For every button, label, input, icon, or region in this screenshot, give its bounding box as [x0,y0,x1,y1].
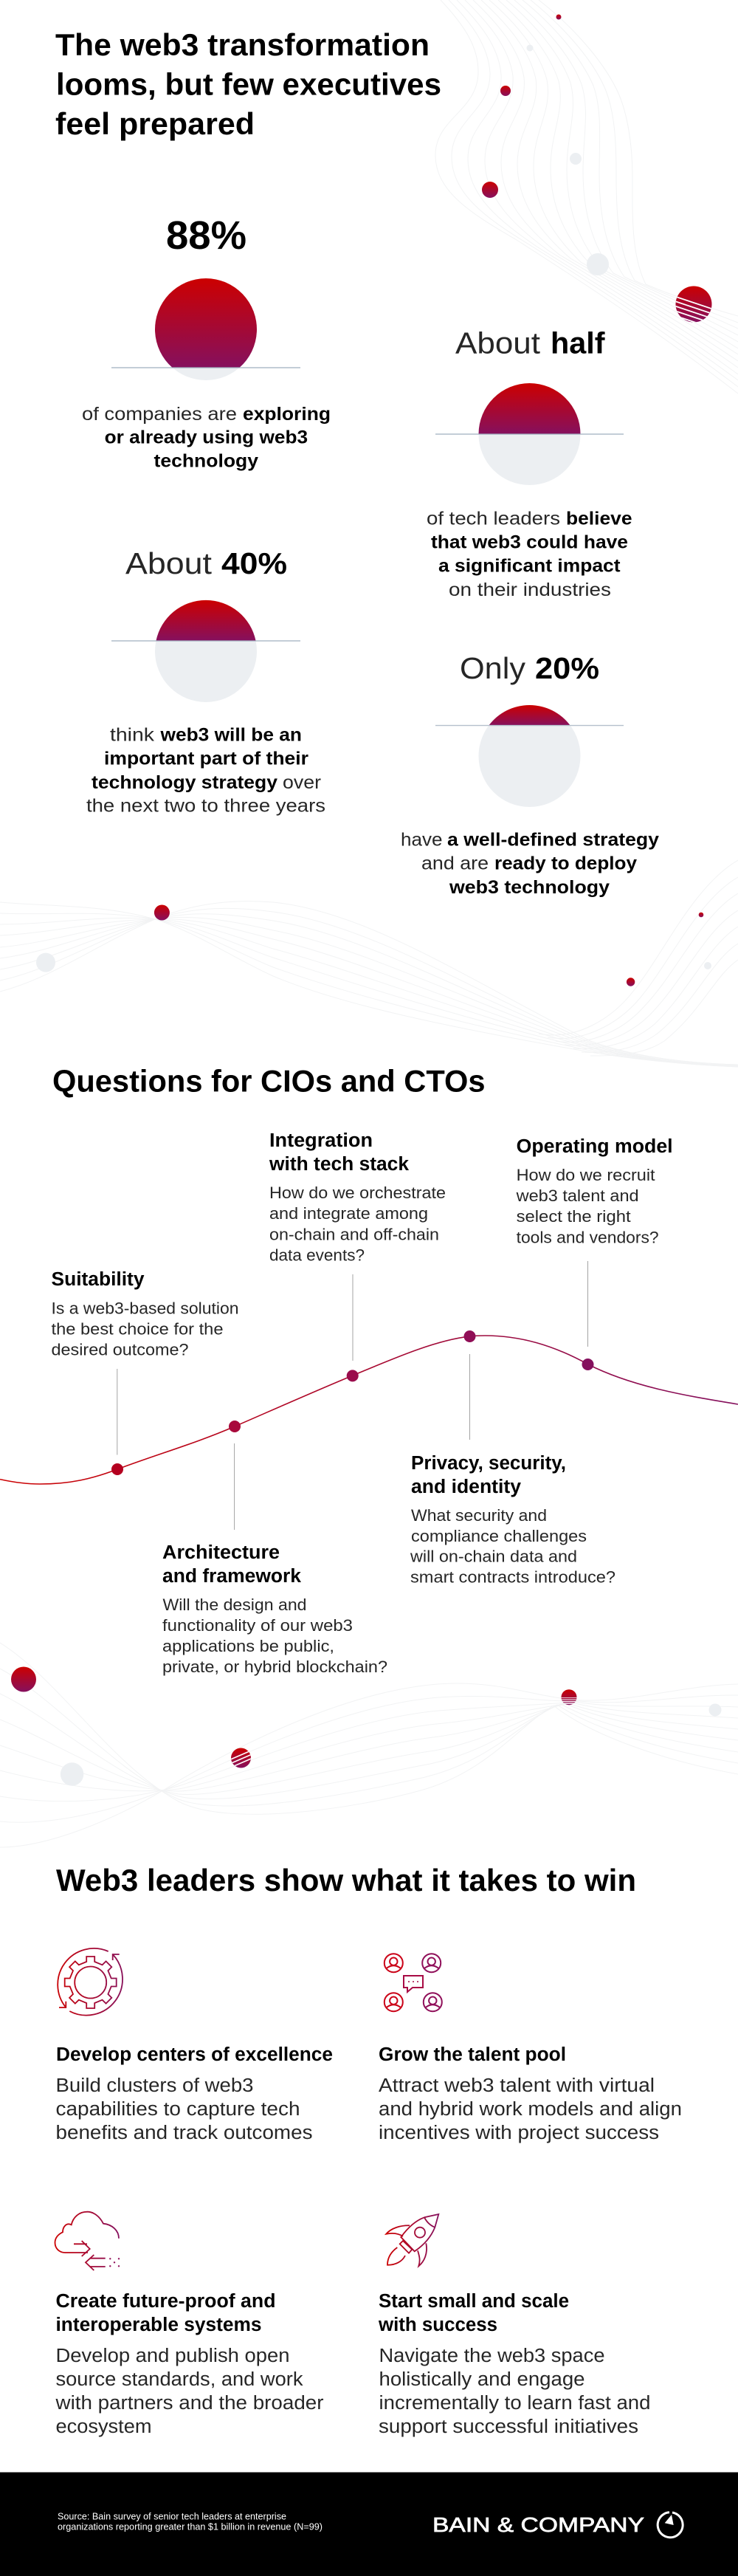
source note: Source: Bain survey of senior tech leaders at enterprise [58,2512,286,2522]
logo: Bain & Company [432,2513,683,2538]
icon: cloud with data arrows [55,2212,120,2270]
card text: ecosystem [56,2417,152,2437]
card text: source standards, and work [56,2369,303,2390]
panel: grow the talent pool [379,1954,682,2143]
icon: rocket [386,2214,438,2266]
title: looms, but few executives [56,66,441,102]
stat description: technology [154,450,258,471]
card text [379,2075,682,2143]
stat description: have [401,830,443,851]
question: architecture and framework: functionality of our web3 [162,1616,353,1635]
decorative dots: middle [36,905,711,986]
stat headline: 40% [221,546,287,580]
title: The web3 transformation [55,27,430,62]
stat description: exploring [243,404,331,425]
card text: Build clusters of web3 [56,2075,254,2096]
question: integration with tech stack: How do we orchestrate [269,1184,446,1202]
question: integration with tech stack: data events? [269,1246,365,1264]
question: privacy, security, and identity: will on-chain data and [410,1548,577,1565]
panel: only 20% [401,651,659,898]
stat headline [460,651,599,685]
decorative dots: lower [11,1667,722,1786]
stat description: a well-defined strategy [447,830,659,851]
stat description: ready to deploy [494,853,637,874]
question: integration with tech stack: on-chain and off-chain [269,1226,439,1243]
card text: capabilities to capture tech [56,2099,300,2120]
question: integration with tech stack [269,1130,446,1264]
question: operating model: web3 talent and [516,1186,639,1205]
chart: 40% circle [111,600,300,702]
decorative dots: top right [482,15,716,334]
stat description: the next two to three years [86,796,325,817]
card text: Develop and publish open [56,2346,289,2366]
card text: incentives with project success [379,2123,659,2143]
heading: web3 leaders show what it takes to win: Web3 leaders show what it takes to win [56,1863,636,1897]
stat description: or already using web3 [105,427,308,447]
footer band [0,2472,738,2576]
title: feel prepared [55,106,255,141]
chart: 88% circle [111,278,300,380]
card text: holistically and engage [379,2369,584,2390]
card text [379,2346,651,2437]
question: suitability: Suitability [52,1269,145,1290]
stat headline: half [551,326,605,360]
card heading: Create future-proof and [56,2291,276,2312]
question: operating model [516,1136,673,1246]
title [55,27,441,141]
question: suitability: desired outcome? [52,1341,189,1359]
source note: organizations reporting greater than $1 billion in revenue (N=99) [58,2522,323,2532]
stat description [82,404,331,471]
question: architecture and framework: private, or hybrid blockchain? [162,1658,387,1676]
icon: gear with circular arrows [58,1948,123,2016]
heading: questions for CIOs and CTOs: Questions for CIOs and CTOs [52,1063,486,1099]
card text: support successful initiatives [379,2417,638,2437]
icon: people around a speech bubble [384,1954,442,2011]
stat description: of tech leaders [427,508,560,529]
card heading: with success [378,2315,497,2335]
card text: with partners and the broader [55,2393,324,2414]
question: architecture and framework: Architecture [162,1542,280,1563]
card text: incrementally to learn fast and [379,2393,651,2414]
card heading: Start small and scale [379,2291,569,2312]
question: privacy, security, and identity: What security and [411,1506,547,1525]
question: architecture and framework [162,1542,387,1676]
card heading [56,2291,276,2335]
stat description: think [110,725,155,746]
panel: 88% exploring [82,213,331,471]
question: privacy, security, and identity [410,1453,615,1586]
stat headline: 20% [535,651,599,685]
question: integration with tech stack: and integrate among [269,1204,428,1223]
stat headline: About [125,546,213,580]
stat headline [125,546,287,580]
stat description: important part of their [104,749,308,769]
card text [55,2346,324,2437]
chart: 20% circle [435,705,624,807]
question: operating model: How do we recruit [517,1166,655,1184]
card text: Attract web3 talent with virtual [379,2075,655,2096]
panel: start small and scale with success [378,2214,651,2437]
card heading: Develop centers of excellence [56,2044,333,2065]
chart: question curve with connector lines and dots [0,1261,738,1530]
card heading: Grow the talent pool [379,2044,566,2065]
stat description: web3 will be an [159,725,302,746]
question: suitability: Is a web3-based solution [52,1299,239,1317]
stat description: on their industries [449,580,611,600]
stat description: and are [421,853,489,874]
source note [58,2512,323,2532]
stat headline: About [455,326,541,360]
question: integration with tech stack: with tech stack [269,1154,410,1175]
stat description: technology strategy [92,772,277,793]
question: privacy, security, and identity: and identity [411,1477,522,1497]
chart: half circle [435,383,624,485]
question: privacy, security, and identity: Privacy, security, [411,1453,566,1474]
question: operating model: tools and vendors? [517,1229,659,1246]
stat headline: Only [460,651,526,685]
card text: benefits and track outcomes [56,2123,313,2143]
stat headline [455,326,605,360]
panel: create future-proof and interoperable systems [55,2212,324,2437]
stat description: over [283,772,321,793]
card text [56,2075,313,2143]
question: architecture and framework: applications be public, [162,1637,334,1655]
logo: Bain & Company: BAIN & COMPANY [432,2513,644,2536]
question: privacy, security, and identity: smart contracts introduce? [410,1568,615,1586]
card heading [378,2291,569,2335]
question: suitability [52,1269,239,1359]
stat description [401,830,659,898]
stat description: web3 technology [449,877,610,898]
stat description [427,508,632,600]
panel: develop centers of excellence [56,1948,333,2143]
stat description: of companies are [82,404,237,425]
question: suitability: the best choice for the [52,1320,223,1338]
question: operating model: select the right [517,1207,631,1226]
question: architecture and framework: and framework [162,1566,302,1587]
question: architecture and framework: Will the design and [162,1596,307,1614]
stat headline: 88% [166,213,246,258]
card text: Navigate the web3 space [379,2346,605,2366]
question: integration with tech stack: Integration [269,1130,373,1151]
stat description: that web3 could have [431,532,628,552]
card text: and hybrid work models and align [379,2099,682,2120]
panel: about half [427,326,632,600]
panel: about 40% [86,546,325,817]
stat description: a significant impact [438,555,621,576]
question: operating model: Operating model [517,1136,673,1157]
card heading: interoperable systems [56,2315,261,2335]
stat description: believe [566,508,632,529]
stat description [86,725,325,817]
question: privacy, security, and identity: compliance challenges [411,1527,587,1545]
